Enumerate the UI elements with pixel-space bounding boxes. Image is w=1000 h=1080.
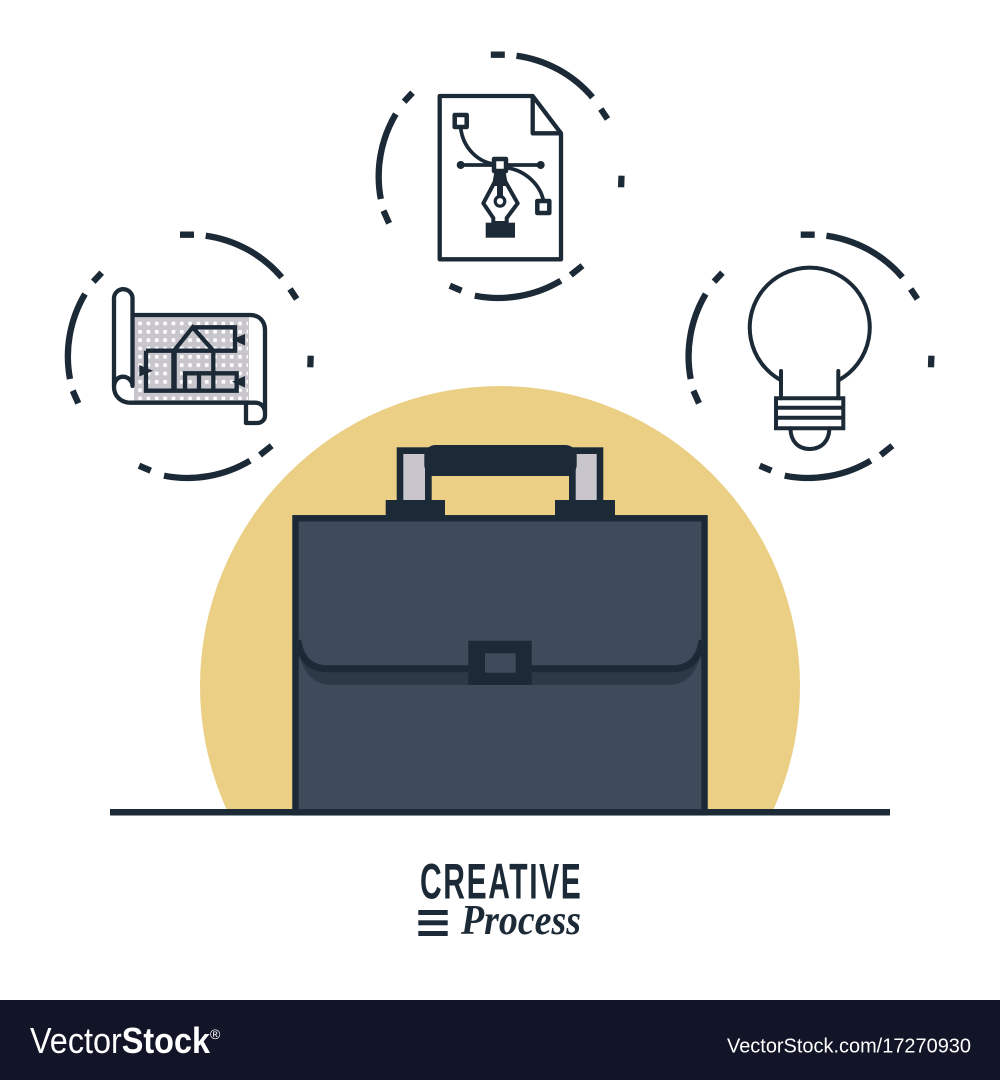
blueprint sheet xyxy=(134,317,249,401)
title word: CREATIVE: CREATIVE xyxy=(420,854,581,909)
blueprint house plan xyxy=(146,327,237,391)
icon: vector file with pen tool xyxy=(440,96,561,259)
icon: briefcase xyxy=(296,445,704,812)
blueprint arrows xyxy=(139,334,245,388)
dashed ring: light bulb xyxy=(689,235,931,478)
blueprint scroll outline xyxy=(114,289,265,423)
briefcase flap shadow xyxy=(299,645,701,685)
bulb glass xyxy=(750,268,870,380)
bezier handle line xyxy=(461,163,541,167)
footer logo: VectorStock xyxy=(30,1020,211,1061)
icon: three bars xyxy=(418,910,448,936)
icon: blueprint xyxy=(114,289,265,423)
footer image id: VectorStock.com/17270930 xyxy=(727,1036,971,1058)
yellow semicircle backdrop xyxy=(200,386,800,809)
footer band xyxy=(0,1000,1000,1080)
bulb screw base xyxy=(776,398,843,428)
blueprint thick wall xyxy=(171,351,177,391)
footer registered mark: ® xyxy=(210,1026,221,1042)
briefcase flap seam xyxy=(298,640,702,669)
briefcase clasp xyxy=(468,641,532,685)
briefcase body xyxy=(296,518,704,812)
blueprint dot grid xyxy=(136,319,248,400)
handle dots xyxy=(457,161,545,169)
bulb neck xyxy=(781,371,838,398)
bulb tip xyxy=(790,428,829,449)
dashed ring: blueprint xyxy=(68,235,311,478)
document fold xyxy=(533,96,561,133)
document outline xyxy=(440,96,561,259)
pen nib xyxy=(483,171,518,238)
anchor points xyxy=(455,115,549,213)
dashed ring: vector file xyxy=(379,55,622,298)
briefcase handle xyxy=(386,445,615,516)
bezier curves xyxy=(461,128,543,200)
ground line xyxy=(110,809,890,816)
icon: light bulb xyxy=(750,268,870,449)
title word: Process: Process xyxy=(460,898,581,944)
title: Creative Process xyxy=(418,854,581,944)
briefcase flap xyxy=(299,522,701,669)
